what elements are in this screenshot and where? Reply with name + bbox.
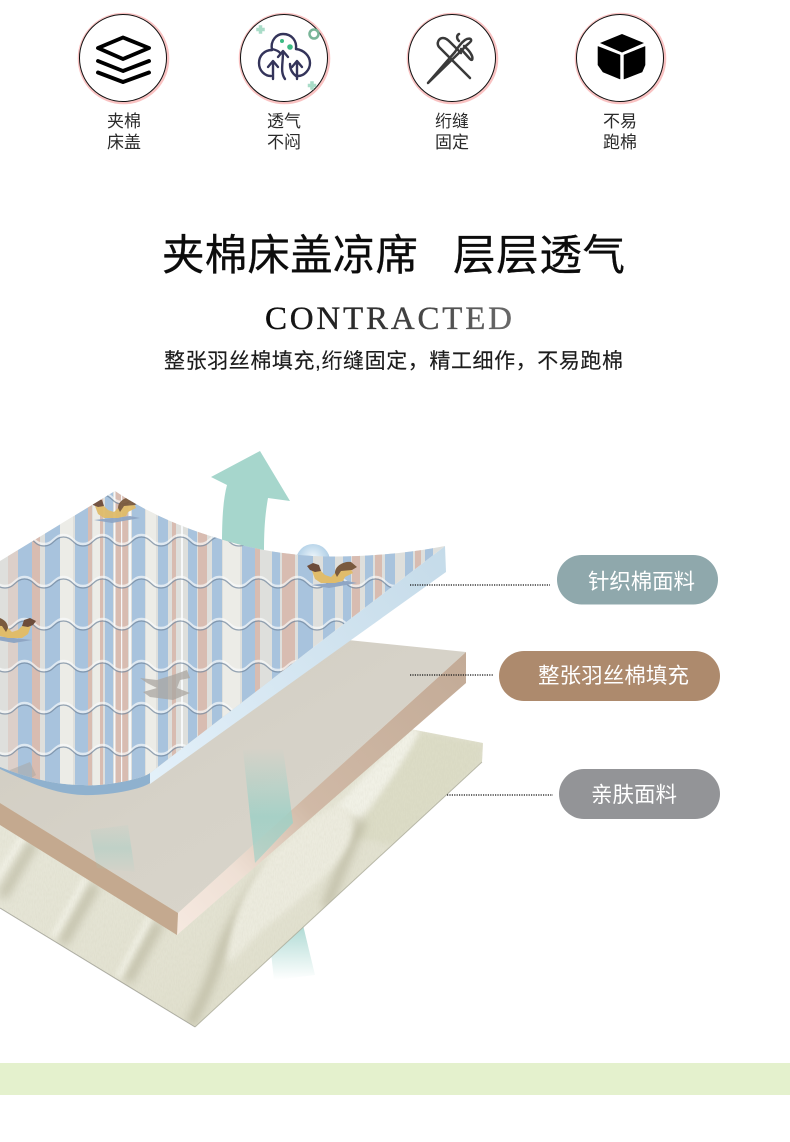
fine vertical seams bbox=[114, 490, 183, 800]
top layer: knitted cotton fabric bbox=[0, 491, 444, 786]
title: 夹棉床盖凉席 bbox=[162, 233, 418, 280]
icon label: breathable: 透气 bbox=[267, 112, 301, 131]
icon: breathable trees bbox=[240, 14, 329, 103]
label: skin-friendly fabric bbox=[559, 769, 720, 819]
label: full-sheet silk-cotton filling: 整张羽丝棉填充 bbox=[538, 664, 689, 688]
middle layer: full-sheet silk-cotton filling bbox=[0, 640, 466, 935]
leader line: knitted cotton bbox=[410, 584, 550, 586]
footer green band bbox=[0, 1063, 790, 1095]
leader line: skin-friendly fabric bbox=[447, 794, 553, 796]
icon label: quilted cover bbox=[107, 112, 141, 152]
airflow band below the layers bbox=[268, 925, 315, 980]
label: knitted cotton fabric bbox=[557, 555, 718, 604]
icon label: stitched: 固定 bbox=[435, 133, 469, 152]
ghost horse bbox=[140, 670, 190, 700]
icon label: no shifting: 跑棉 bbox=[603, 133, 637, 152]
side edge of top layer bbox=[150, 546, 446, 784]
icon: crossed needles bbox=[408, 14, 497, 103]
layered mattress illustration bbox=[0, 451, 490, 1035]
title bbox=[162, 233, 625, 280]
label: knitted cotton fabric: 针织棉面料 bbox=[588, 570, 695, 594]
icon: cube bbox=[576, 14, 665, 103]
icon label: stitched: 绗缝 bbox=[435, 112, 469, 131]
icon label: quilted cover: 床盖 bbox=[107, 133, 141, 152]
airflow bands over the filling bbox=[90, 748, 293, 872]
icon label: no shifting bbox=[603, 112, 637, 152]
blue stripes bbox=[18, 490, 433, 800]
icon label: stitched bbox=[435, 112, 469, 152]
subtitle: CONTRACTED: CONTRACTED bbox=[265, 301, 512, 337]
bottom layer: skin-friendly fabric bbox=[0, 725, 490, 1035]
water bubble bbox=[296, 544, 330, 578]
label: full-sheet silk-cotton filling bbox=[499, 651, 720, 701]
pink stripes bbox=[8, 490, 421, 800]
icon label: quilted cover: 夹棉 bbox=[107, 112, 141, 131]
pale stripes bbox=[60, 490, 240, 800]
title: 层层透气 bbox=[453, 233, 625, 280]
description line: 整张羽丝棉填充,绗缝固定，精工细作，不易跑棉 bbox=[164, 350, 623, 373]
rocking horses bbox=[92, 498, 140, 523]
icon label: breathable: 不闷 bbox=[267, 133, 301, 152]
icon label: breathable bbox=[267, 112, 301, 152]
leader line: filling bbox=[410, 674, 493, 676]
icon label: no shifting: 不易 bbox=[603, 112, 637, 131]
label: skin-friendly fabric: 亲肤面料 bbox=[591, 783, 677, 807]
icon: layers, quilted cover bbox=[79, 14, 168, 103]
upward airflow arrow bbox=[211, 451, 290, 552]
